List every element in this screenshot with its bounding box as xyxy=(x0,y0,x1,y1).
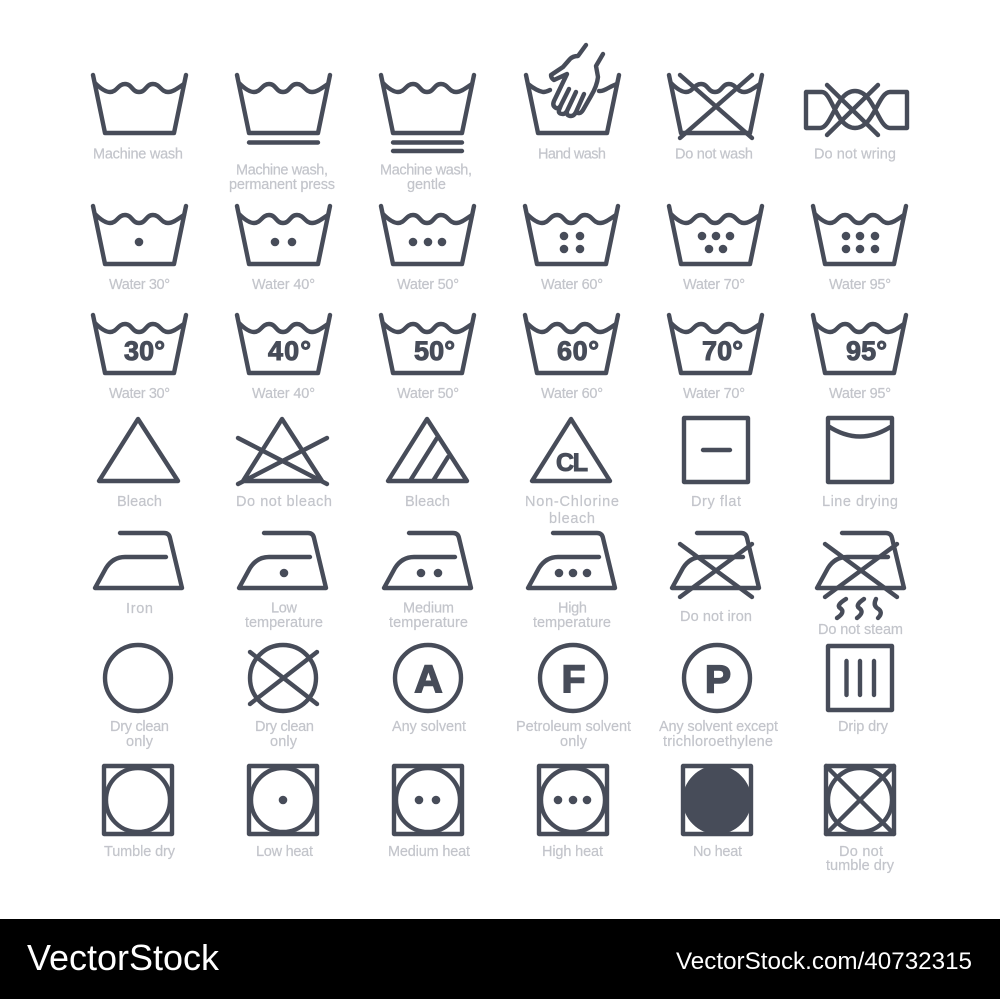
panel: any solvent xyxy=(392,645,466,735)
label: water 50: Water 50° xyxy=(397,386,459,402)
label: petroleum solvent only xyxy=(516,719,631,750)
footer bar xyxy=(0,919,1000,999)
label: medium temperature: temperature xyxy=(389,615,468,631)
label: do not wring: Do not wring xyxy=(814,146,896,162)
icon: tub six dots xyxy=(813,206,906,264)
icon: iron xyxy=(95,533,182,588)
label: hand wash: Hand wash xyxy=(538,146,606,162)
icon: circle P: P xyxy=(705,658,731,702)
label: dry clean only: Dry clean xyxy=(255,719,314,735)
label: low temperature: Low xyxy=(271,600,298,616)
panel: dry flat xyxy=(684,418,748,510)
label: medium temperature: Medium xyxy=(403,600,454,616)
icon: square with dash xyxy=(684,418,748,482)
label: machine wash permanent press xyxy=(229,162,335,193)
label: do not tumble dry xyxy=(826,844,895,874)
panel: iron high temperature xyxy=(528,533,615,631)
label: do not steam: Do not steam xyxy=(818,622,903,638)
icon: crossed tub xyxy=(669,75,762,138)
label: non-chlorine bleach: Non-Chlorine xyxy=(525,494,619,510)
panel: water 30 dots xyxy=(93,206,186,293)
label: water 30: Water 30° xyxy=(109,277,170,293)
icon: tumble two dots xyxy=(394,766,462,834)
label: machine wash gentle: gentle xyxy=(407,177,446,193)
panel: water 30 numeric xyxy=(93,315,186,402)
label: tumble dry: Tumble dry xyxy=(104,844,176,860)
label: do not tumble dry: Do not xyxy=(839,844,883,860)
panel: do not iron xyxy=(672,533,759,625)
panel: do not steam xyxy=(817,533,904,638)
icon: tumble square xyxy=(104,766,172,834)
label: water 60: Water 60° xyxy=(541,277,603,293)
panel: petroleum solvent only xyxy=(516,645,631,750)
label: non-chlorine bleach xyxy=(525,494,619,527)
label: high temperature: temperature xyxy=(533,615,611,631)
icon: square with curve xyxy=(828,418,892,482)
panel: any solvent except trichloroethylene xyxy=(659,645,778,750)
label: water 40: Water 40° xyxy=(252,277,315,293)
icon: tumble filled xyxy=(683,766,751,834)
panel: machine wash permanent press xyxy=(229,75,335,193)
icon: circle A: A xyxy=(414,658,443,702)
label: machine wash gentle xyxy=(380,162,472,193)
label: water 50: Water 50° xyxy=(397,277,459,293)
label: medium temperature xyxy=(389,600,468,631)
icon: crossed triangle xyxy=(238,419,327,484)
icon: crossed tumble xyxy=(826,766,894,834)
icon: tub one dot xyxy=(93,206,186,264)
panel: no heat xyxy=(683,766,751,860)
label: dry clean only: Dry clean xyxy=(110,719,169,735)
icon: crossed twist xyxy=(806,85,907,135)
label: machine wash gentle: Machine wash, xyxy=(380,162,472,178)
panel: hand wash xyxy=(526,45,619,162)
label: dry clean only xyxy=(255,719,314,750)
label: dry clean only: only xyxy=(270,734,298,750)
label: any solvent except trichloroethylene: trichloroethylene xyxy=(663,734,773,750)
panel: water 50 numeric xyxy=(381,315,474,402)
panel: do not tumble dry xyxy=(826,766,895,874)
panel: do not wring xyxy=(806,85,907,162)
label: low temperature xyxy=(245,600,323,631)
panel: line drying xyxy=(822,418,898,510)
icon: wash tub with one bar xyxy=(237,75,330,142)
label: machine wash permanent press: permanent press xyxy=(229,177,335,193)
icon: wash tub with two bars xyxy=(381,75,474,151)
label: high temperature: High xyxy=(558,600,587,616)
panel: iron low temperature xyxy=(239,533,326,631)
panel: water 60 numeric xyxy=(525,315,618,402)
panel: iron xyxy=(95,533,182,617)
panel: water 70 dots xyxy=(669,206,762,293)
label: water 60: Water 60° xyxy=(541,386,603,402)
icon: triangle CL: CL xyxy=(556,449,588,477)
label: low heat: Low heat xyxy=(256,844,313,860)
icon: square with bars xyxy=(828,646,892,710)
label: water 70: Water 70° xyxy=(683,277,745,293)
label: any solvent: Any solvent xyxy=(392,719,466,735)
icon: tub 95 degrees: 95° xyxy=(846,336,887,366)
label: bleach: Bleach xyxy=(117,494,162,510)
icon: tub three dots xyxy=(381,206,474,264)
icon: triangle xyxy=(99,419,178,481)
label: machine wash: Machine wash xyxy=(93,146,183,162)
panel: medium heat xyxy=(388,766,470,860)
label: do not wash: Do not wash xyxy=(675,146,753,162)
label: petroleum solvent only: only xyxy=(560,734,588,750)
label: machine wash permanent press: Machine wash, xyxy=(236,162,328,178)
label: any solvent except trichloroethylene xyxy=(659,719,778,750)
icon: circle xyxy=(105,645,171,711)
panel: low heat xyxy=(249,766,317,860)
label: do not iron: Do not iron xyxy=(680,609,752,625)
panel: do not bleach xyxy=(236,419,332,510)
label: water 40: Water 40° xyxy=(252,386,315,402)
panel: machine wash xyxy=(93,75,186,162)
panel: water 70 numeric xyxy=(669,315,762,402)
panel: water 95 dots xyxy=(813,206,906,293)
label: no heat: No heat xyxy=(693,844,742,860)
label: low temperature: temperature xyxy=(245,615,323,631)
icon: tub with hand xyxy=(526,45,619,133)
label: non-chlorine bleach: bleach xyxy=(549,511,595,527)
panel: drip dry xyxy=(828,646,892,735)
panel: dry clean crossed xyxy=(250,645,317,750)
icon: iron three dots xyxy=(528,533,615,588)
icon: tub 40 degrees: 40° xyxy=(268,336,311,366)
panel: water 40 numeric xyxy=(237,315,330,402)
icon: tumble one dot xyxy=(249,766,317,834)
panel: bleach xyxy=(99,419,178,510)
label: medium heat: Medium heat xyxy=(388,844,470,860)
label: high temperature xyxy=(533,600,611,631)
label: water 70: Water 70° xyxy=(683,386,745,402)
icon: tub two dots xyxy=(237,206,330,264)
icon: iron one dot xyxy=(239,533,326,588)
panel: water 50 dots xyxy=(381,206,474,293)
label: water 95: Water 95° xyxy=(829,277,891,293)
panel: tumble dry xyxy=(104,766,176,860)
label: drip dry: Drip dry xyxy=(838,719,889,735)
icon: striped triangle xyxy=(388,419,467,481)
label: line drying: Line drying xyxy=(822,494,898,510)
label: iron: Iron xyxy=(126,601,153,617)
icon: iron two dots xyxy=(384,533,471,588)
icon: tub five dots xyxy=(669,206,762,264)
label: any solvent except trichloroethylene: Any solvent except xyxy=(659,719,778,735)
panel: non-chlorine bleach xyxy=(525,419,619,527)
icon: tub four dots xyxy=(525,206,618,264)
icon: tub 60 degrees: 60° xyxy=(557,336,599,366)
icon: tub 70 degrees: 70° xyxy=(702,336,743,366)
icon: crossed iron with steam xyxy=(817,533,904,618)
icon: wash tub xyxy=(93,75,186,133)
icon: crossed circle xyxy=(250,645,317,711)
label: petroleum solvent only: Petroleum solvent xyxy=(516,719,631,735)
icon: tub 30 degrees: 30° xyxy=(124,336,165,366)
panel: water 60 dots xyxy=(525,206,618,293)
label: water 95: Water 95° xyxy=(829,386,891,402)
panel: machine wash gentle xyxy=(380,75,474,193)
label: high heat: High heat xyxy=(542,844,603,860)
footer image id: VectorStock.com/40732315 xyxy=(676,948,972,975)
label: dry clean only xyxy=(110,719,169,750)
icon: tumble three dots xyxy=(539,766,607,834)
panel: iron medium temperature xyxy=(384,533,471,631)
panel: water 40 dots xyxy=(237,206,330,293)
panel: water 95 numeric xyxy=(813,315,906,402)
icon: crossed iron xyxy=(672,533,759,597)
label: do not tumble dry: tumble dry xyxy=(826,858,895,874)
label: do not bleach: Do not bleach xyxy=(236,494,332,510)
panel: high heat xyxy=(539,766,607,860)
icon: circle F: F xyxy=(562,658,585,702)
label: water 30: Water 30° xyxy=(109,386,170,402)
panel: bleach striped xyxy=(388,419,467,510)
footer logo text: VectorStock xyxy=(27,937,220,978)
icon: tub 50 degrees: 50° xyxy=(414,336,455,366)
label: bleach: Bleach xyxy=(405,494,450,510)
panel: do not wash xyxy=(669,75,762,162)
label: dry flat: Dry flat xyxy=(691,494,741,510)
label: dry clean only: only xyxy=(126,734,154,750)
panel: dry clean only xyxy=(105,645,171,750)
